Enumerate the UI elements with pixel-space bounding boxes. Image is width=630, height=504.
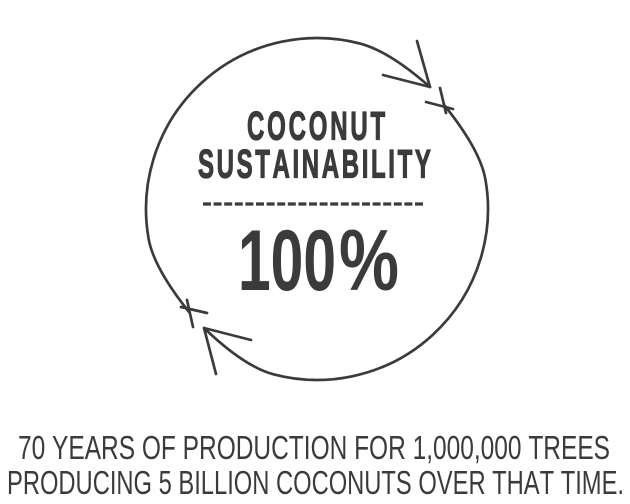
heading: coconut sustainability [198,103,434,186]
heading: coconut sustainability: SUSTAINABILITY [198,141,434,186]
heading: coconut sustainability: COCONUT [247,103,388,148]
dashed divider [203,202,425,206]
cycle diagram: circular arrows [146,38,488,380]
arrow arc: left and top [146,38,430,327]
arrow arc: right and bottom [204,88,488,380]
caption [7,429,624,501]
statistic: 100%: % [339,213,399,309]
statistic: 100%: 100 [238,213,336,309]
